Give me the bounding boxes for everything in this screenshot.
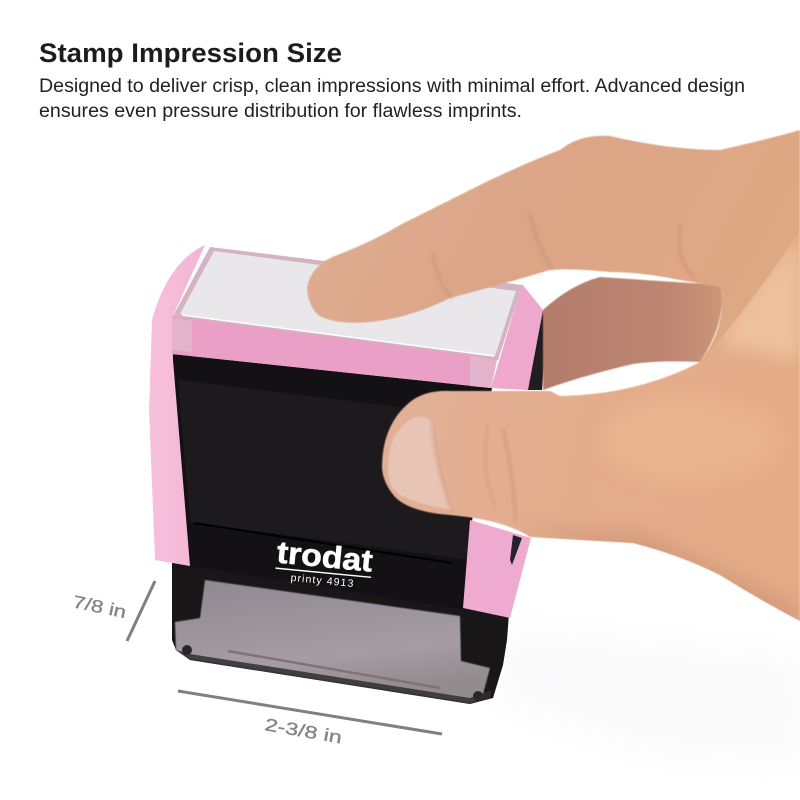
black side inset <box>510 535 522 565</box>
window lower clear rim <box>176 650 492 704</box>
band glass corners <box>172 318 497 388</box>
dimension: width: 2-3/8 in <box>263 714 344 747</box>
shadow: cast on table <box>500 630 800 760</box>
bright palm crease highlight <box>725 240 800 360</box>
window corner screws <box>182 645 483 701</box>
logo: trodat <box>274 535 374 591</box>
pink left shell <box>149 245 205 566</box>
hand <box>307 130 800 621</box>
dimension: width <box>178 691 442 747</box>
thumb nail <box>388 417 452 510</box>
stamp product <box>149 245 546 704</box>
dimension: depth: 7/8 in <box>71 591 128 622</box>
label edge highlight <box>182 315 494 356</box>
skin creases <box>432 215 695 520</box>
logo: trodat: printy 4913 <box>290 572 355 590</box>
front groove line <box>194 523 452 563</box>
stamp black front <box>172 354 492 610</box>
description text: Designed to deliver crisp, clean impressions with minimal effort. Advanced design <box>39 76 745 97</box>
title: Stamp Impression Size <box>39 38 342 68</box>
bright thumb base <box>600 395 780 485</box>
front inner panel <box>178 380 470 560</box>
window inner rail <box>228 651 440 688</box>
palm highlights and shading <box>538 249 800 621</box>
top glass frame <box>172 247 522 360</box>
pink right lower shell <box>463 520 531 618</box>
white label <box>180 251 516 356</box>
clear window base <box>175 580 490 703</box>
description text: ensures even pressure distribution for flawless imprints. <box>39 101 522 122</box>
pink band below label <box>172 316 497 388</box>
black side panel <box>525 310 546 390</box>
lower palm shading <box>538 529 800 621</box>
logo: trodat: trodat <box>275 535 374 579</box>
thumb and palm <box>382 230 800 621</box>
back finger in shadow <box>543 277 722 390</box>
pink right upper shell <box>491 284 543 390</box>
stamp lower black body <box>172 558 510 704</box>
description text <box>39 76 745 122</box>
dimension: depth <box>71 581 155 641</box>
index finger and back of hand <box>307 130 800 400</box>
